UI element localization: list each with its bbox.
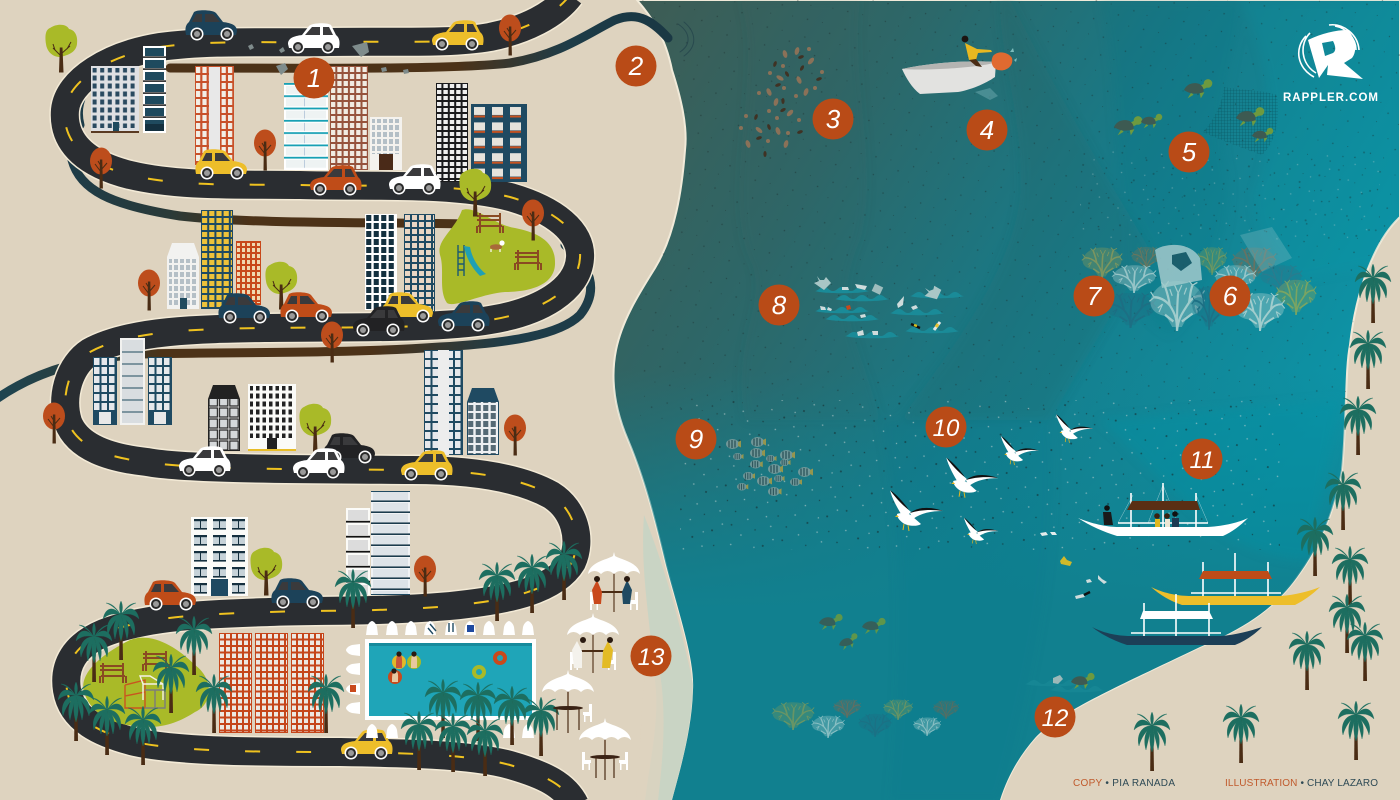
lime ring: [474, 667, 484, 677]
floating trash near boats: [1040, 532, 1107, 599]
orange ring: [495, 653, 505, 663]
row 2 buildings: [167, 210, 435, 312]
turtles lower: [819, 614, 886, 651]
bags and bottles: [814, 276, 944, 336]
building red: [236, 241, 261, 305]
seagulls (10): [890, 414, 1093, 544]
building white middle: [120, 338, 145, 425]
park lawn upper: [439, 209, 555, 304]
building tall white navy: [424, 350, 463, 455]
block 1: [219, 633, 252, 733]
boat hull: [902, 61, 996, 94]
building wide white: [191, 517, 248, 596]
bench west: [100, 663, 126, 683]
fisherman: [962, 36, 992, 67]
navy boat: [1092, 594, 1262, 645]
rowboat with fisherman (4): [902, 36, 1017, 100]
swimmers on floats: [388, 651, 421, 684]
building brown: [330, 66, 368, 170]
umbrella table with diners 1: [588, 552, 640, 612]
logo wordmark: RAPPLER.COM: [1283, 92, 1378, 104]
block 3: [291, 633, 324, 733]
sun loungers: [346, 621, 534, 738]
numbered markers 1 to 13: 6: [1223, 281, 1238, 311]
row 5 red apartment blocks: [219, 633, 324, 733]
swimming pool: [365, 639, 536, 720]
building orange: [195, 66, 234, 165]
building white house: [167, 243, 199, 309]
numbered markers 1 to 13: 11: [1190, 447, 1214, 474]
numbered markers 1 to 13: 4: [980, 115, 994, 145]
faint net: [1240, 227, 1292, 272]
numbered markers 1 to 13: 8: [772, 290, 787, 320]
drainage channel into sea: [0, 17, 694, 400]
building navy roof: [467, 388, 499, 455]
building small white: [370, 117, 402, 170]
numbered markers 1 to 13: 1: [307, 63, 321, 93]
coral reef damaged (6, 7): [1082, 227, 1316, 331]
block 2: [255, 633, 288, 733]
reef fish school (9): [726, 437, 813, 496]
bench east: [143, 651, 169, 671]
numbered markers 1 to 13: 7: [1087, 281, 1103, 311]
park furniture upper: [458, 213, 541, 276]
building navy right: [148, 357, 172, 425]
credit: copy: COPY • PIA RANADA: [1073, 778, 1175, 789]
blast fragments: [992, 52, 1012, 70]
park furniture lower: [100, 651, 169, 708]
beach dining umbrellas: [542, 552, 640, 780]
numbered markers 1 to 13: 5: [1182, 137, 1197, 167]
logo mark: [1299, 25, 1363, 79]
slide: [458, 245, 486, 276]
waves: [815, 287, 964, 338]
yellow boat: [1151, 553, 1320, 605]
building dark roof: [208, 385, 240, 451]
row 4 buildings: [191, 491, 410, 596]
building grey: [91, 66, 139, 133]
road: [65, 0, 580, 800]
numbered markers 1 to 13: 12: [1042, 705, 1068, 732]
turtle among trash (12): [1025, 673, 1104, 692]
building tall stripes: [371, 491, 410, 595]
numbered markers 1 to 13: [294, 46, 1250, 738]
orange tree over road: [321, 322, 343, 362]
trees across the city: [43, 14, 544, 596]
fishing net: [1203, 87, 1278, 155]
building teal: [284, 83, 328, 170]
healthy coral reef lower: [772, 700, 959, 738]
building white tower: [365, 214, 397, 310]
turtles in net (5): [1114, 79, 1278, 155]
park lawn lower: [83, 638, 209, 727]
building navy bands: [143, 46, 166, 133]
umbrella table empty 3: [542, 670, 594, 733]
building stripes: [346, 508, 370, 595]
palm trees by the road and pool: [58, 541, 582, 776]
numbered markers 1 to 13: 3: [826, 104, 841, 134]
building white black windows: [248, 384, 296, 451]
tourist boats (11): [1078, 483, 1320, 645]
passengers: [1103, 505, 1179, 527]
scaffold play structure: [125, 676, 165, 708]
umbrella table empty 4: [579, 718, 631, 780]
bench south: [515, 250, 541, 270]
numbered markers 1 to 13: 13: [638, 644, 665, 671]
pale shallow water along shore: [636, 515, 693, 800]
bench north: [477, 213, 503, 233]
plastic waste at sea (8): [814, 276, 964, 338]
umbrella table with diners 2: [567, 613, 619, 673]
fish school dying brown (3): [739, 47, 824, 157]
Rappler logo: [1283, 25, 1378, 104]
numbered markers 1 to 13: 2: [628, 51, 644, 81]
beach palm trees: [1134, 264, 1391, 771]
numbered markers 1 to 13: 9: [689, 424, 703, 454]
building black: [436, 83, 468, 182]
credit: illustration: ILLUSTRATION • CHAY LAZARO: [1225, 778, 1378, 789]
numbered markers 1 to 13: 10: [933, 415, 960, 442]
row 3 buildings: [93, 338, 499, 455]
debris under boat: [975, 88, 998, 100]
building yellow windows: [201, 210, 233, 309]
torn plastic bag: [1155, 245, 1202, 288]
litter on road: [248, 42, 409, 75]
sea: [600, 0, 1400, 800]
building navy: [471, 104, 527, 182]
cars along the road: [144, 10, 490, 760]
white boat: [1078, 483, 1248, 536]
building peach tower: [404, 214, 435, 312]
dog: [490, 240, 505, 252]
row 1 buildings: [91, 46, 527, 182]
building navy left: [93, 357, 117, 425]
